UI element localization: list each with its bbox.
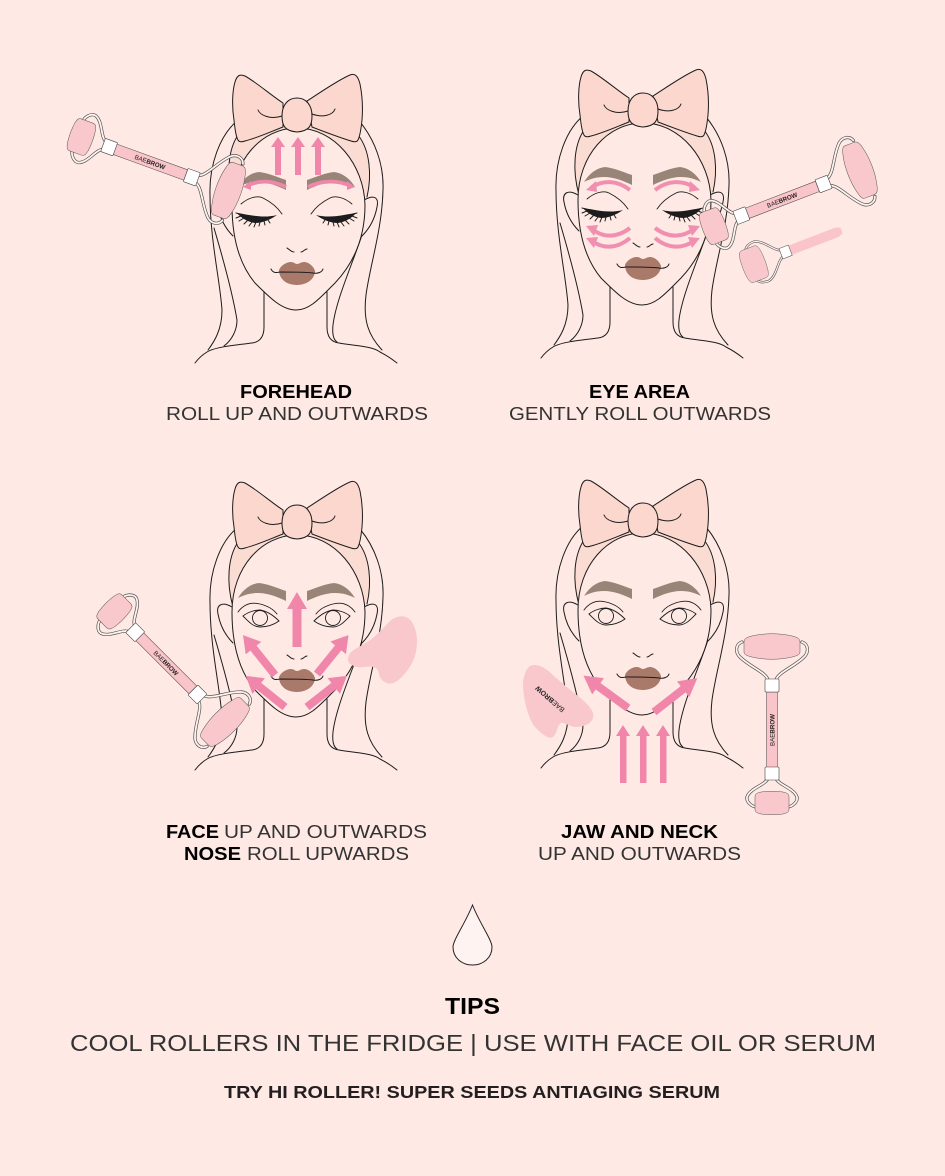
tips heading: TIPS — [445, 993, 500, 1019]
arrows: forehead up and outwards — [243, 137, 355, 190]
panel: forehead — [58, 74, 428, 424]
panel: face and nose — [81, 481, 427, 864]
roller brand label: BAEBROW — [133, 154, 167, 172]
caption: forehead: FOREHEAD — [240, 382, 352, 402]
caption: face and nose: FACE — [166, 822, 219, 842]
gua sha brand label: BAEBROW — [534, 684, 566, 713]
roller: forehead — [58, 100, 253, 228]
caption: jaw and neck: UP AND OUTWARDS — [538, 844, 741, 864]
caption: face and nose: NOSE — [184, 844, 241, 864]
roller: face — [81, 578, 259, 756]
roller: jaw — [737, 634, 807, 815]
arrows: jaw and neck up and outwards — [578, 668, 703, 783]
panel: eye area — [509, 69, 885, 424]
caption: face and nose: UP AND OUTWARDS — [224, 822, 427, 842]
arrows: eye area outwards — [586, 181, 700, 248]
caption: jaw and neck — [538, 822, 741, 864]
tips text: COOL ROLLERS IN THE FRIDGE | USE WITH FACE OIL OR SERUM — [70, 1030, 876, 1056]
gua sha: face — [348, 616, 417, 684]
panel: jaw and neck — [523, 479, 807, 864]
caption: eye area: EYE AREA — [589, 382, 690, 402]
roller: eye area large — [690, 132, 885, 263]
panel: tips — [70, 905, 876, 1102]
caption: eye area: GENTLY ROLL OUTWARDS — [509, 404, 771, 424]
face illustration: face and nose — [195, 481, 397, 770]
face illustration: eye area — [541, 69, 743, 358]
icon: oil drop — [453, 905, 492, 965]
face illustration: jaw and neck — [541, 479, 743, 768]
caption: forehead: ROLL UP AND OUTWARDS — [166, 404, 428, 424]
roller: eye area small — [735, 211, 849, 288]
caption: face and nose — [166, 822, 427, 864]
face illustration: forehead — [195, 74, 397, 363]
roller brand label: BAEBROW — [152, 650, 180, 678]
roller brand label: BAEBROW — [769, 713, 776, 746]
roller brand label: BAEBROW — [766, 191, 799, 210]
caption: face and nose: ROLL UPWARDS — [247, 844, 409, 864]
product recommendation: TRY HI ROLLER! SUPER SEEDS ANTIAGING SERUM — [224, 1082, 720, 1102]
caption: eye area — [509, 382, 771, 424]
caption: forehead — [166, 382, 428, 424]
gua sha: jaw — [523, 665, 593, 738]
caption: jaw and neck: JAW AND NECK — [561, 822, 718, 842]
arrows: face up and outwards, nose upwards — [235, 592, 356, 715]
